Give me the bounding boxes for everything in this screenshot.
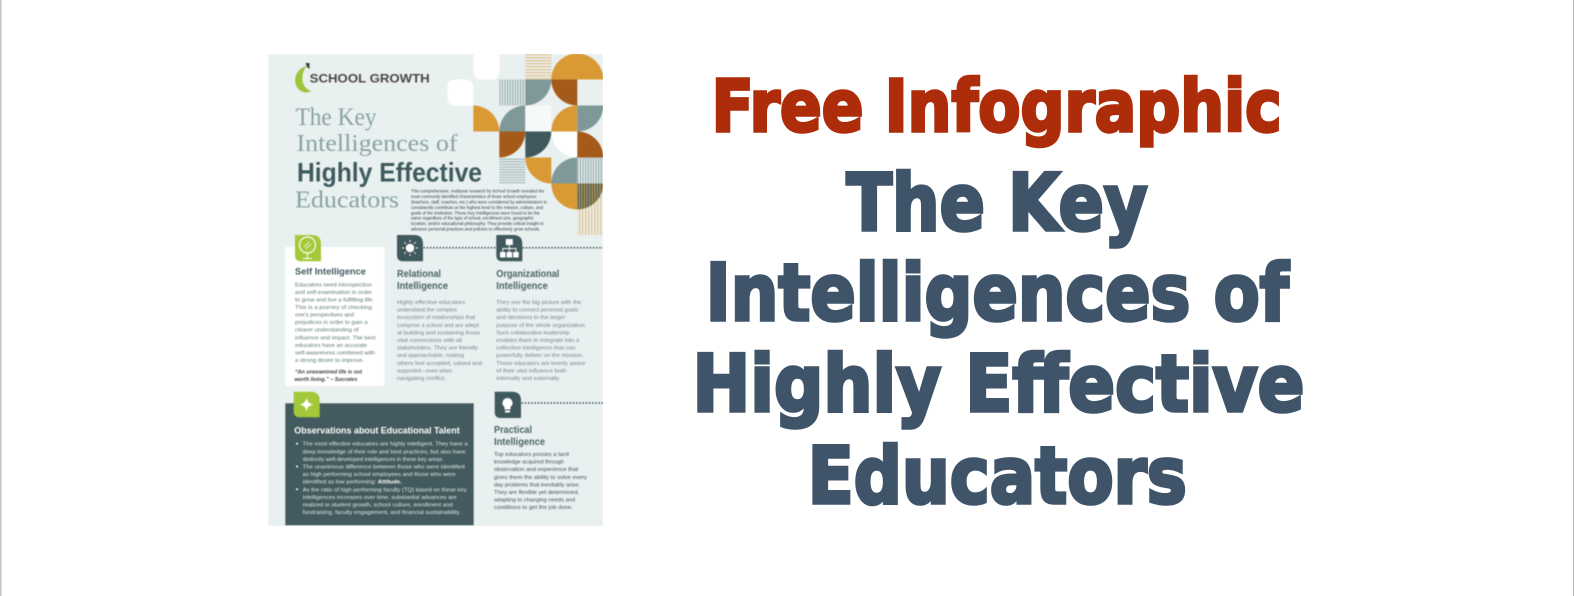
heading: practical intelligence: [494, 425, 545, 448]
panel: practical intelligence: [494, 392, 587, 511]
logo: School Growth: [295, 63, 430, 93]
logo: School Growth: SCHOOL GROWTH: [310, 73, 430, 85]
text: practical body: knowledge acquired through: [494, 460, 564, 466]
list: observations bullets: The most effective educators are highly intelligent. They have a: [303, 442, 468, 448]
text: organizational body: Such collaborative leadership: [496, 330, 570, 336]
text: organizational body: ability to connect personal goals: [496, 308, 578, 314]
title: The Key Intelligences of Highly Effective Educators: The Key: [846, 157, 1148, 249]
heading: Free Infographic: Free Infographic: [712, 65, 1282, 148]
text: organizational body: enables them to integrate into a: [496, 338, 580, 344]
title: The Key Intelligences of Highly Effective Educators: [692, 157, 1304, 522]
text: practical body: observation and experience that: [494, 467, 578, 473]
intro paragraph: most commonly identified characteristics of those school employees: [411, 194, 537, 199]
text: self intelligence body: This is a journey of checking: [295, 305, 372, 311]
heading: relational intelligence: Relational: [397, 269, 441, 280]
intro paragraph: same regardless of the type of school, enrollment size, geographic: [411, 216, 534, 221]
poster title: Highly Effective: [297, 158, 482, 188]
list: observations bullets: The unanimous difference between those who were identified: [303, 464, 465, 470]
heading: observations: Observations about Educational Talent: [294, 425, 460, 436]
heading: organizational intelligence: [496, 269, 560, 292]
text: practical body: gives them the ability to solve every: [494, 475, 587, 481]
text: organizational body: and decisions to the larger: [496, 315, 565, 321]
text: organizational body: collective intelligence that can: [496, 346, 575, 352]
title: The Key Intelligences of Highly Effective Educators: Highly Effective: [692, 338, 1304, 430]
text: self intelligence body: a strong desire to improve.: [295, 358, 364, 364]
intro paragraph: This comprehensive, multiyear research by School Growth revealed the: [411, 189, 545, 194]
dotted connectors: [424, 248, 603, 403]
icon: sun: [397, 235, 423, 261]
text: self intelligence body: prejudices in order to gain a: [295, 320, 368, 326]
title: The Key Intelligences of Highly Effective Educators: Educators: [808, 430, 1187, 522]
text: self intelligence body: to grow and live a fulfilling life.: [295, 297, 374, 303]
list: observations bullets: [296, 442, 468, 516]
poster title: Educators: [295, 188, 399, 214]
text: relational body: understand the complex: [397, 308, 457, 314]
list: observations bullets: fundraising, faculty engagement, and financial sustainability.: [303, 510, 461, 516]
text: self intelligence body: self-awareness combined with: [295, 350, 375, 356]
quote: Socrates: “An unexamined life is not: [295, 369, 363, 375]
text: relational body: supported—even when: [397, 368, 452, 374]
title: The Key Intelligences of Highly Effective Educators: Intelligences of: [706, 247, 1290, 339]
icon: sparkle: [294, 392, 320, 417]
list: observations bullets: As the ratio of high-performing faculty (TQ) based on these key: [303, 487, 467, 493]
poster title: Intelligences of: [296, 131, 458, 157]
panel: infographic poster thumbnail: [268, 54, 603, 526]
list: observations bullets: distinctly well-developed intelligences in these key areas.: [303, 457, 444, 463]
list: observations bullets: intelligences increases over time, substantial advances are: [303, 495, 457, 501]
text: self intelligence body: Educators need introspection: [295, 282, 372, 288]
text: organizational body: They see the big picture with the: [496, 300, 582, 306]
text: self intelligence body: one's perspectives and: [295, 313, 354, 319]
text: practical body: Top educators posses a tacit: [494, 452, 569, 458]
heading: relational intelligence: [397, 269, 448, 292]
heading: practical intelligence: Intelligence: [494, 437, 545, 448]
text: organizational body: [496, 300, 587, 382]
text: practical body: adapting to changing needs and: [494, 498, 575, 504]
heading: organizational intelligence: Organizational: [496, 269, 560, 280]
text: self intelligence body: clearer understanding of: [295, 328, 359, 334]
text: relational body: navigating conflict.: [397, 376, 446, 382]
icon: light bulb: [495, 392, 521, 418]
heading: organizational intelligence: Intelligence: [496, 281, 548, 292]
geometric pattern: [447, 54, 603, 235]
list: observations bullets: deep knowledge of their role and best practices, but also have: [303, 449, 466, 455]
text: organizational body: purpose of the whole organization.: [496, 323, 587, 329]
icon: org chart: [496, 235, 522, 261]
intro paragraph: advance personal practices and policies to effectively grow schools.: [411, 226, 540, 232]
panel: self intelligence: [285, 235, 384, 386]
text: practical body: They are flexible yet determined,: [494, 490, 579, 496]
quote: Socrates: [294, 369, 363, 383]
icon: mirror: [295, 235, 321, 261]
intro paragraph: (teachers, staff, coaches, etc.) who were considered by administrators to: [411, 200, 547, 204]
text: self intelligence body: [295, 282, 376, 364]
text: self intelligence body: influence and impact. The best: [295, 335, 376, 341]
text: relational body: at building and sustaining those: [397, 330, 481, 336]
text: practical body: conditions to get the job done.: [494, 505, 573, 511]
poster title: The Key: [296, 104, 377, 131]
list: observations bullets: as high performing school employees and those who were: [303, 472, 456, 478]
intro paragraph: location, and/or educational philosophy. They provide critical insight to: [411, 221, 544, 226]
text: relational body: comprise a school and are adept: [397, 323, 479, 329]
text: relational body: and approachable, making: [397, 353, 464, 359]
panel: organizational intelligence: [496, 235, 587, 382]
text: relational body: ecosystem of relationships that: [397, 315, 475, 321]
intro paragraph: [411, 189, 547, 232]
text: organizational body: of their vital influence both: [496, 368, 566, 374]
intro paragraph: consistently contribute at the highest level to the mission, culture, and: [411, 205, 543, 210]
text: relational body: Highly effective educators: [397, 300, 465, 306]
text: self intelligence body: and self-examination in order: [295, 290, 372, 296]
text: relational body: stakeholders. They are friendly: [397, 346, 478, 352]
heading: self intelligence: Self Intelligence: [295, 267, 366, 278]
panel: observations about educational talent: [285, 392, 474, 525]
text: relational body: vital connections with all: [397, 338, 462, 344]
quote: Socrates: worth living.” – Socrates: [294, 377, 358, 383]
text: organizational body: powerfully deliver on the mission.: [496, 353, 584, 359]
list: observations bullets: identified as low performing: Attitude.: [303, 480, 402, 486]
text: practical body: day problems that inevitably arise.: [494, 482, 580, 488]
text: relational body: others feel accepted, valued and: [397, 361, 482, 367]
text: practical body: [494, 452, 587, 511]
text: self intelligence body: educators have an accurate: [295, 343, 368, 349]
text: organizational body: These educators are keenly aware: [496, 361, 586, 367]
heading: practical intelligence: Practical: [494, 425, 532, 436]
text: relational body: [397, 300, 482, 382]
list: observations bullets: realized in student growth, school culture, enrollment and: [303, 502, 453, 508]
panel: relational intelligence: [397, 235, 482, 382]
poster title: [295, 104, 482, 214]
text: organizational body: internally and externally.: [496, 376, 561, 382]
intro paragraph: goals of the institution. These Key Intelligences were found to be the: [411, 210, 540, 215]
heading: relational intelligence: Intelligence: [397, 281, 448, 292]
